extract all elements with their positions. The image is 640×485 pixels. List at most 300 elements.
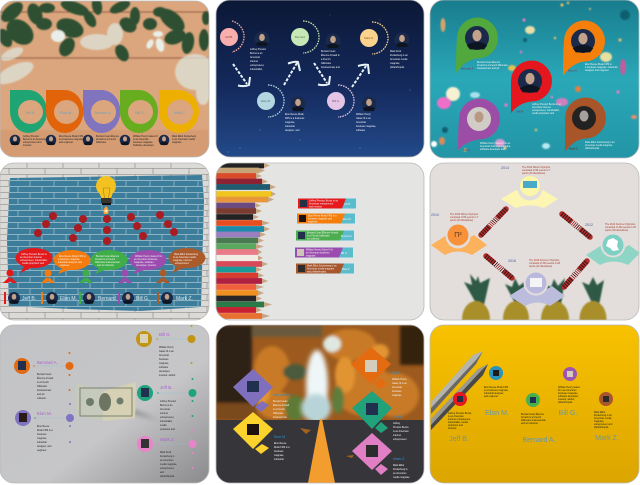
node: Bill G.: business magnate, — [558, 392, 578, 395]
bubble: purple: William Henry Gates III is — [135, 255, 163, 258]
bios row: Arnault is a French — [96, 138, 117, 141]
bubble: orange: Elon Reeve Musk FRS is — [59, 255, 86, 258]
bubble: purple: an American business — [134, 258, 158, 261]
idea dots — [34, 211, 178, 245]
ring: Bill G.: Bill G. — [135, 111, 145, 115]
node: Mark Z.: media magnate, — [160, 463, 177, 466]
ring: Bernard A.: Bernard A. — [95, 111, 111, 115]
bios row: is an American — [133, 138, 149, 141]
pin: Bernard: Bernard Jean Étienne — [477, 61, 501, 64]
name row: Bill G. — [136, 296, 149, 302]
bubble: purple: developer, investor. — [136, 264, 157, 267]
diamond: Elon: business — [274, 450, 284, 453]
node: Mark Z.: Mark Z. — [160, 437, 175, 442]
node: Mark Z.: philanthropist. — [594, 426, 609, 429]
node: Jeff B.: is an American — [448, 415, 464, 418]
pin: Elon — [563, 21, 618, 76]
diamond: Jeff: is an American — [393, 430, 409, 433]
banner: Mark: Mark Elliot Zuckerberg is an — [307, 264, 337, 268]
banner: Jeff: and investor — [309, 206, 322, 208]
node: Elon M.: designer, and — [37, 445, 52, 448]
node: Elon M.: Elon Reeve Musk FRS — [484, 386, 509, 389]
banner: Mark: American media magnate — [307, 268, 335, 270]
bios row: Software developer. — [133, 144, 154, 147]
pin: Bill: software developer and — [480, 148, 506, 151]
node: Mark Z.: Zuckerberg is an — [594, 414, 612, 417]
node: Elon M.: and engineer. — [484, 395, 499, 398]
bios row: billionaire. — [96, 141, 107, 144]
node: Elon — [257, 85, 306, 132]
pin: Jeff: entrepreneur, industrialist, — [532, 109, 560, 112]
icon: light bulb — [96, 176, 116, 214]
pin: Jeff — [511, 61, 562, 115]
pin: Jeff: Jeffrey Preston Bezos is an — [532, 103, 562, 106]
diamond: Bernard: is a French — [273, 408, 285, 411]
node: 2010: consisted of 86 events in 7 — [450, 216, 479, 219]
node: Elon M.: Musk FRS is a — [37, 429, 53, 432]
diamond: Bernard: businessman — [273, 416, 288, 419]
pin: Bernard: Bernard A. — [461, 66, 474, 70]
node: Mark: magnate, — [390, 62, 400, 65]
pin: Bill: William Henry Gates III is an — [480, 142, 511, 145]
ring: Mark Z. — [159, 90, 199, 133]
bios row — [10, 135, 197, 147]
node: Mark Z.: magnate, — [594, 420, 604, 423]
arrow: up 1 — [284, 62, 300, 85]
node: Jeff: American — [250, 56, 261, 59]
node: 2016: 2016 — [508, 259, 516, 263]
diamond: Jeff: Preston Bezos — [393, 426, 409, 429]
bios row: Elon Reeve Musk FRS — [59, 135, 84, 138]
bubble: orange: industrial designer and — [58, 261, 83, 264]
road stripe — [308, 419, 335, 483]
bios row: Bernard Jean Étienne — [96, 135, 120, 138]
bios row: is an American media — [172, 138, 196, 141]
node: Jeff: entrepreneur, — [250, 64, 265, 67]
node: Bernard A.: and art collector. — [521, 422, 539, 425]
bubble: green: Bernard Jean Étienne — [96, 255, 120, 258]
node: Bernard A.: Bernard Jean — [37, 373, 52, 376]
diamond: Jeff: entrepreneur — [393, 438, 407, 441]
diamond: Bill: Bill G. — [392, 371, 402, 375]
bubble: green: and art collector. — [97, 264, 115, 267]
bubble: green: Arnault is a French — [95, 258, 116, 261]
node: Jeff B.: proprietor and — [448, 424, 464, 427]
node: Bill G.: philanthropist. — [558, 401, 573, 404]
node: Bernard A.: Étienne Arnault — [37, 377, 54, 380]
node: 2012: consisted of 302 events in 26 — [605, 226, 637, 229]
node: Elon: industrial — [285, 125, 295, 128]
pencils — [216, 166, 271, 316]
node: 2016: consisted of 306 events in 28 — [529, 262, 561, 265]
diamond: Bill: business — [392, 390, 402, 393]
banner: Jeff: Jeffrey Preston Bezos is an — [309, 200, 339, 202]
node: Mark Z.: Mark Elliot — [594, 411, 605, 414]
bubble: brown: is an American media — [173, 256, 197, 259]
node: Elon M. — [15, 403, 74, 452]
node: Elon M.: magnate, — [37, 437, 47, 440]
diamond: Jeff: Jeff B. — [393, 415, 403, 419]
node: Mark: Zuckerberg is an — [390, 54, 408, 57]
diamond: Bill — [351, 347, 408, 397]
arrow: down 1 — [233, 64, 250, 86]
diamond: Mark: Zuckerberg is — [393, 468, 408, 471]
pin: Mark: Mark Elliot Zuckerberg is an — [585, 141, 615, 144]
diamond: Bill: Gates III is an — [392, 382, 407, 385]
bios row: Mark Elliot Zuckerberg — [172, 135, 197, 138]
name row: Mark Z. — [176, 296, 193, 302]
banner: Bill: magnate. — [306, 254, 316, 258]
diamond: Elon: Elon M. — [274, 435, 286, 439]
node: Bill: Gates III is an — [356, 117, 371, 120]
bubble: brown: magnate, internet — [173, 259, 192, 262]
node: Jeff B.: Jeffrey Preston Bezos — [448, 412, 472, 415]
node: Jeff B.: Jeffrey Preston — [160, 400, 177, 403]
bios row: investor. — [23, 144, 32, 147]
pin: Jeff: media proprietor and — [532, 112, 555, 115]
banner: Bill: an American business — [306, 252, 330, 254]
node: 2016: The 2016 Summer Olympics — [529, 259, 560, 262]
pin: Bill: American business magnate, — [480, 145, 511, 148]
panel: night sky template — [216, 0, 424, 157]
node: Mark: Mark Zuck — [390, 50, 402, 53]
node: Bill: software — [356, 129, 366, 132]
ring: Mark Z.: Mark Z. — [174, 111, 186, 115]
node: 2012: 2012 — [585, 223, 593, 227]
pin: Elon: Elon Reeve Musk FRS is — [585, 63, 612, 66]
node: Jeff: Bezos is an — [250, 52, 263, 55]
node: Jeff: Jeffrey Preston — [250, 48, 267, 51]
node: Bill: William Henry — [356, 113, 372, 116]
node: 2010 — [431, 213, 487, 255]
node: 2016 — [508, 259, 565, 306]
diamond: Mark: an American — [393, 472, 407, 475]
node: Mark: American media — [390, 58, 408, 61]
node: 2012: sports (39 disciplines) — [605, 229, 628, 232]
diamond: Mark: Mark Z. — [393, 457, 405, 461]
banner: Jeff — [297, 198, 357, 209]
node: Bill G.: Bill G. — [559, 410, 577, 417]
panel: autumn road template — [216, 325, 425, 483]
node: Mark Z.: American media — [594, 417, 612, 420]
diamond: Jeff: internet — [393, 434, 401, 437]
ring: Elon M. — [46, 90, 83, 133]
diamond: Jeff — [352, 391, 409, 441]
node: 2014 winter: The 2014 Winter Olympics — [522, 166, 551, 169]
node: Elon M.: industrial — [37, 441, 47, 444]
name row: Bernard — [98, 296, 116, 302]
node: Jeff B.: American — [160, 408, 171, 411]
panel: yellow pencils template — [430, 325, 639, 483]
panel: pineapple olympics template — [430, 163, 640, 337]
diamond: Bernard: Étienne Arnault — [273, 404, 290, 407]
dollar bill — [76, 382, 158, 421]
node: Jeff B. — [137, 378, 196, 431]
banner: Bill: Bill G. — [341, 252, 348, 255]
pin: Elon: a business magnate, industrial — [585, 66, 618, 69]
diamond: Bill: American — [392, 386, 403, 389]
node: Bernard: billionaire — [321, 62, 332, 65]
node: Bernard A.: Arnault is a French — [521, 416, 542, 419]
node: Mark Z.: entrepreneur, — [160, 467, 175, 470]
banner: Jeff: American entrepreneur — [309, 202, 334, 206]
node: 2010: The 2010 Winter Olympics — [450, 213, 479, 216]
node: Bill: business magnate, — [356, 125, 376, 128]
node: Bernard A.: Bernard A. — [37, 360, 58, 365]
diamond: Mark — [352, 433, 410, 479]
node: Mark Z.: Zuckerberg is — [160, 455, 175, 458]
bubble: orange: a business magnate, — [58, 258, 80, 261]
node: Bernard A.: Bernard Jean Étienne — [521, 413, 545, 416]
pin: Mark: philanthropist — [585, 147, 600, 150]
node: Bill G.: William Henry — [159, 346, 175, 349]
banner: Jeff: Jeff B. — [344, 203, 351, 206]
bios row: and engineer. — [59, 141, 74, 144]
banner: Bill — [294, 247, 354, 258]
banner: Bill: William Henry Gates III is — [306, 248, 334, 252]
ring: Bernard A. — [83, 90, 120, 133]
pin: Elon: Elon M. — [568, 68, 578, 72]
person icons — [3, 270, 170, 283]
node: 2014 winter — [501, 166, 558, 208]
node: Mark Z.: Mark Z. — [595, 435, 619, 442]
node: Mark: Mark Z. — [364, 36, 374, 40]
node: Jeff: internet — [250, 60, 258, 63]
node: Mark — [360, 22, 410, 69]
bubble: green — [90, 250, 128, 274]
node: Bernard: Étienne Arnault is — [321, 54, 340, 57]
diamond: Bernard: Bernard Jean — [273, 400, 288, 403]
node: Bernard A.: businessman — [37, 389, 52, 392]
node: Jeff B.: Jeff B. — [449, 436, 469, 443]
panel: coloured pencils template — [216, 163, 424, 320]
node: Bernard A.: Bernard A. — [522, 437, 556, 444]
banner: Bernard: art collector. — [307, 238, 320, 240]
node: Bernard: businessman and — [321, 66, 340, 69]
node: Bernard A.: collector. — [37, 397, 47, 400]
bios row: Bezos is an American — [23, 138, 47, 141]
diamond: Bill: magnate — [392, 394, 402, 397]
panel: brick wall template — [0, 163, 209, 320]
node: Jeff B.: internet entrepreneur, — [448, 418, 471, 421]
banner: Bernard: Bernard Jean Étienne Arnault — [307, 232, 339, 234]
bar connectors — [481, 209, 590, 287]
node: Jeff B.: proprietor and — [160, 428, 176, 431]
diamond: Elon: industrial — [274, 458, 284, 461]
diamond: Elon: Elon Reeve — [274, 442, 287, 445]
banner: Elon: business magnate and — [308, 218, 333, 220]
node: Jeff B.: industrialist, media — [448, 421, 468, 424]
node: Jeff B.: entrepreneur, — [160, 416, 175, 419]
node: Elon M.: industrial designer, — [484, 392, 504, 395]
node: Elon M.: Elon Reeve — [37, 425, 50, 428]
node: 2010: Π² — [454, 232, 462, 239]
diamond: Elon — [233, 412, 290, 461]
node: 2016: sports (42 disciplines) — [529, 265, 552, 268]
node: Bernard A. — [14, 352, 74, 400]
node: Elon M.: business — [37, 433, 47, 436]
node: Jeff B.: internet — [160, 412, 168, 415]
pin: Bernard: Arnault is a French billionaire — [477, 64, 508, 67]
node: Elon M.: Elon M. — [485, 410, 509, 417]
node: Bernard A.: is a French — [37, 381, 49, 384]
diamond: Bill: William Henry — [392, 378, 408, 381]
node: Jeff B.: industrialist, — [160, 420, 173, 423]
panel: dollar template — [0, 325, 209, 483]
node: 2014 winter: 2014 — [501, 166, 509, 170]
pin: Bill: Bill G. — [463, 148, 471, 152]
pin: Jeff: American internet — [532, 106, 551, 109]
node: 2012: The 2012 Summer Olympics — [605, 223, 636, 226]
pin: Bernard: businessman and art — [477, 67, 500, 70]
name row: Jeff B. — [22, 296, 36, 302]
bubble: green: billionaire businessman — [95, 261, 121, 264]
node: Bill G.: Gates III is an — [159, 350, 174, 353]
node: Jeff: industrialist, — [250, 68, 263, 71]
banner: Bernard: is a French billionaire — [307, 234, 330, 238]
node: 2014 winter: consisted of 98 events in 7 — [522, 169, 551, 172]
bubble: brown: entrepreneur. — [175, 262, 190, 265]
bubble: red: media proprietor and — [22, 262, 45, 265]
pin: Mark — [565, 98, 615, 152]
node: Bernard A.: billionaire — [37, 385, 48, 388]
node: Jeff: Jeff B. — [225, 35, 233, 39]
node: Bill G.: Bill G. — [159, 332, 171, 337]
node: Bernard: a French — [321, 58, 331, 61]
node: Jeff — [220, 21, 270, 71]
banner: Bernard — [295, 230, 355, 241]
pin: Mark: American media magnate, — [585, 144, 613, 147]
node: Mark Z.: Mark Zuck — [160, 451, 172, 454]
node: Elon: FRS is a business — [285, 117, 305, 120]
node: Jeff B. — [448, 392, 472, 443]
ring: Bill G. — [120, 90, 158, 133]
node: Bill G. — [558, 367, 581, 417]
node: Bill G.: magnate, — [159, 362, 169, 365]
pin: Elon: designer and engineer. — [585, 69, 610, 72]
bubble: red: Jeffrey Preston Bezos is — [21, 253, 48, 256]
node: Bill — [327, 85, 376, 132]
bios row: magnate. — [172, 141, 182, 144]
node: Bill G.: business — [159, 358, 169, 361]
node: Elon: magnate, — [285, 121, 295, 124]
banner: Elon — [296, 213, 356, 224]
bios row: Jeffrey Preston — [23, 135, 40, 138]
diamond: Jeff: Jeffrey — [393, 422, 401, 425]
panel: confetti pins template — [430, 0, 639, 158]
panel: botanical wood template — [0, 0, 215, 157]
banner: Mark: Mark Z. — [342, 268, 350, 271]
banner: Mark — [295, 263, 355, 274]
bubble: brown: Mark Elliot Zuckerberg — [174, 253, 199, 256]
node: Elon M. — [484, 366, 509, 417]
diamond: Elon: Musk FRS is a — [274, 446, 290, 449]
node: Bernard A. — [521, 393, 556, 444]
node: Bernard: Bernard — [295, 35, 305, 39]
node: Bernard — [291, 21, 340, 69]
bios row: is a business magnate — [59, 138, 83, 141]
diamond: Bernard — [233, 369, 291, 419]
pin: Bill — [458, 99, 511, 152]
node: Jeff B.: Bezos is an — [160, 404, 173, 407]
diamond: Mark: Mark Elliot — [393, 464, 404, 467]
node: Bill G.: American — [159, 354, 170, 357]
node: Bill G.: William Henry Gates — [558, 386, 581, 389]
node: Elon: Elon Reeve Musk — [285, 113, 305, 116]
node: Mark Z.: entrepreneur and — [594, 423, 613, 426]
diamond: Elon: magnate, — [274, 454, 284, 457]
node: Bill: American — [356, 121, 367, 124]
node: Mark Z.: an American — [160, 459, 174, 462]
bios row: entrepreneur and — [23, 141, 42, 144]
node: Elon: Elon M. — [261, 99, 271, 103]
node: Elon M.: is a business magnate, — [484, 389, 509, 392]
node: Bernard A.: and art — [37, 393, 45, 396]
node: Bill G.: software developer, — [558, 395, 579, 398]
node: Bill G.: investor, author, — [558, 398, 575, 401]
node: 2010: 2010 — [431, 213, 439, 217]
node: Bernard A.: billionaire businessman — [521, 419, 547, 422]
node: Mark Z. — [594, 392, 619, 442]
bubble: red: an American internet — [20, 256, 42, 259]
arrow: down 2 — [314, 63, 330, 85]
ring: Elon M.: Elon M. — [60, 111, 72, 115]
bubble: purple — [130, 250, 166, 274]
node: Elon: designer, and — [285, 129, 300, 132]
node: 2012 — [585, 223, 640, 265]
bubble: red: entrepreneur, industrialist, — [20, 259, 48, 262]
bios row: William Henry Gates III — [133, 135, 158, 138]
diamond: Mark: media magnate — [393, 476, 410, 479]
node: Bill G.: III is an American — [558, 389, 577, 392]
node: Bill: Bill G. — [332, 99, 340, 103]
bubble: purple: magnate, software — [134, 261, 154, 264]
node: Bill G. — [136, 325, 196, 377]
bubble: orange: engineer. — [60, 264, 70, 267]
name row: Elon M. — [60, 296, 77, 302]
pineapples — [462, 274, 606, 337]
node: Mark Z.: philanthropist. — [160, 475, 175, 478]
node: Bill G.: investor, author, — [159, 374, 176, 377]
bubble: brown — [168, 248, 206, 273]
bubble: red — [16, 248, 52, 273]
node: Mark Z.: and — [160, 471, 165, 474]
node: 2014 winter: sports (15 disciplines) — [522, 172, 545, 175]
node: 2010: sports (15 disciplines) — [450, 219, 473, 222]
banner: Elon: Elon Reeve Musk FRS is a — [308, 214, 337, 218]
ring: Jeff B. — [10, 90, 47, 133]
node: Elon M.: Elon M. — [37, 411, 52, 416]
graphite pencils — [431, 351, 488, 430]
pin: Mark: Mark Z. — [569, 146, 579, 150]
bubble: orange — [54, 250, 90, 274]
node: Jeff B.: media — [160, 424, 167, 427]
node: Bill G.: software — [159, 366, 169, 369]
node: Bill G.: developer, — [159, 370, 170, 373]
diamond: Bernard: Bernard A. — [274, 393, 291, 397]
banner: Bernard: Bernard A. — [341, 235, 353, 238]
node: Elon M.: engineer. — [37, 449, 47, 452]
pin: Bernard — [456, 18, 508, 73]
bios row: business magnate. — [133, 141, 153, 144]
pin: Jeff: Jeff B. — [516, 110, 524, 114]
node: Jeff B.: Jeff B. — [160, 385, 172, 390]
banner: Elon: Elon M. — [343, 218, 351, 221]
name row — [4, 292, 193, 304]
node: Jeff B.: investor. — [448, 427, 457, 430]
banner: Mark: and philanthropist. — [307, 270, 327, 274]
arrow: up 2 — [352, 65, 369, 87]
